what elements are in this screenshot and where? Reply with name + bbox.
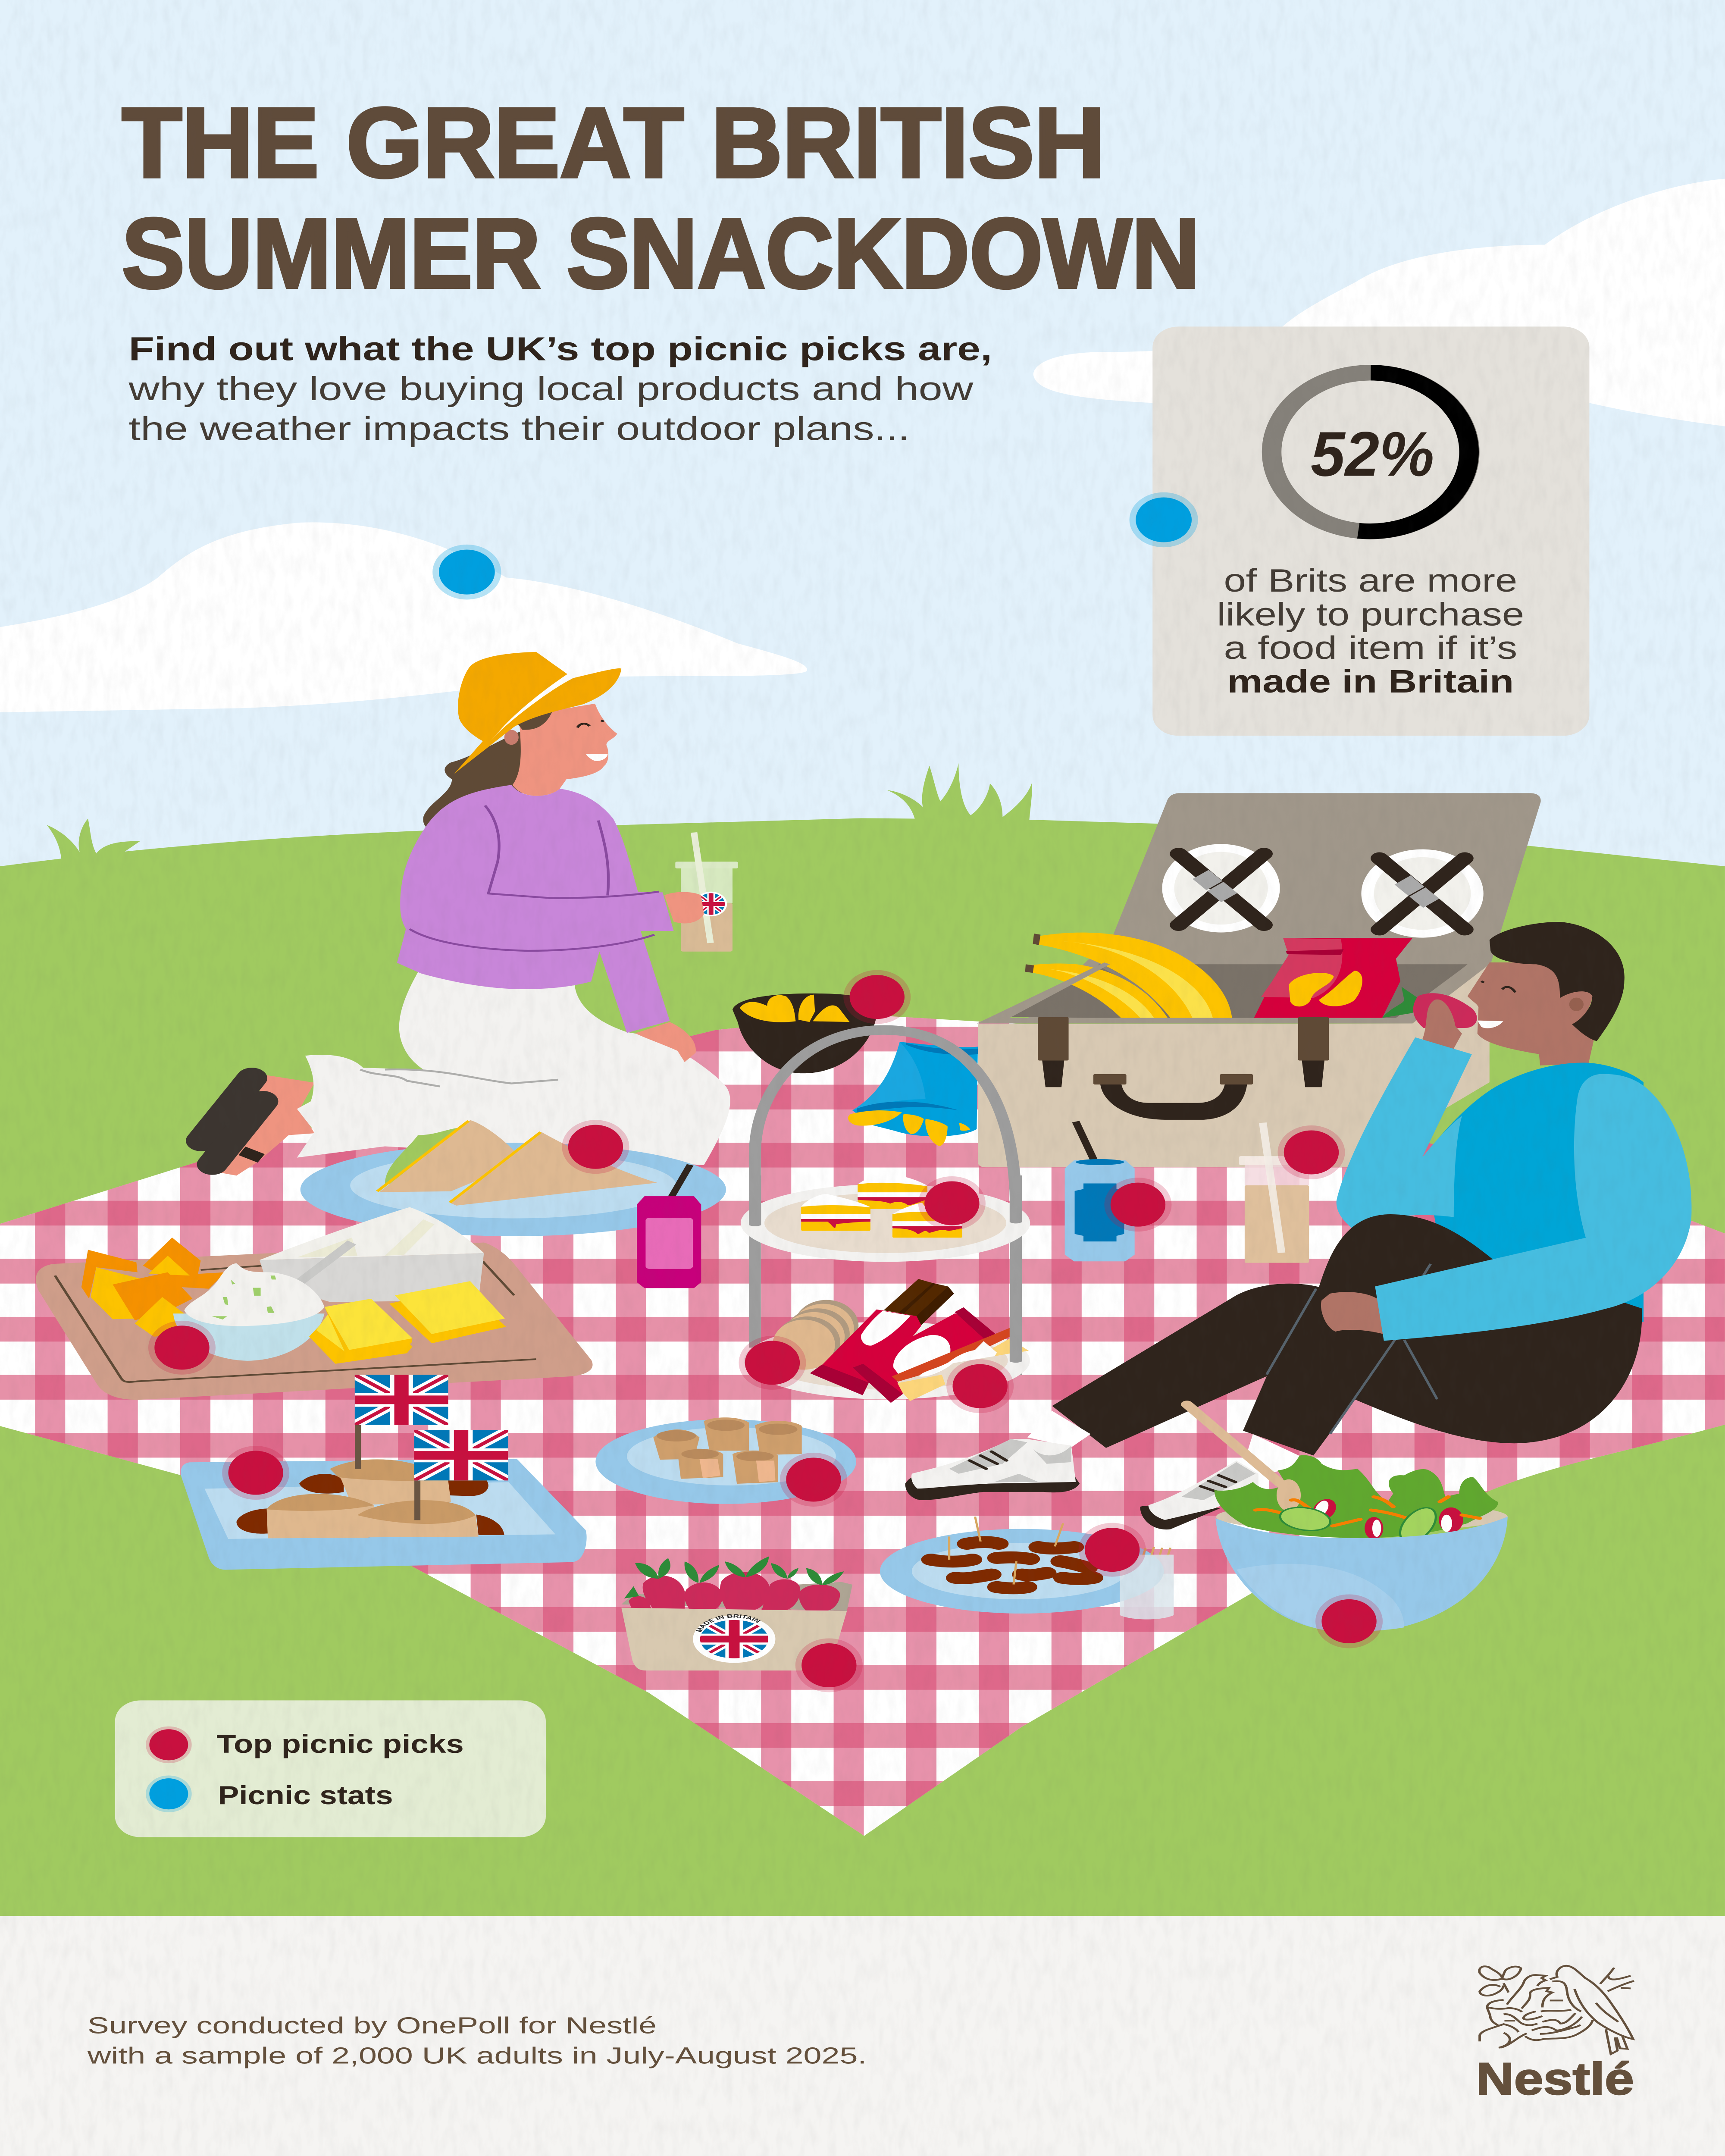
cake slice back <box>858 1172 927 1209</box>
blue can <box>1065 1122 1135 1261</box>
footer band <box>0 1916 1725 2156</box>
red marker: pork pies <box>780 1453 847 1507</box>
stat caption <box>1217 562 1524 699</box>
red marker: bowl of crisps <box>843 970 911 1024</box>
blue marker: stat panel <box>1129 492 1198 547</box>
punnet box <box>621 1608 847 1670</box>
grass tuft left <box>47 818 140 869</box>
tray <box>181 1459 587 1570</box>
donut chart <box>1272 373 1470 531</box>
iced coffee <box>1239 1123 1315 1263</box>
face and neck <box>513 704 617 796</box>
intro text <box>128 331 992 447</box>
cheese slices <box>309 1313 413 1364</box>
chocolate bar <box>883 1279 954 1325</box>
hill <box>0 818 1725 1917</box>
wordmark: Nestlé <box>1476 2053 1634 2104</box>
hat <box>454 652 621 774</box>
head <box>1468 962 1594 1065</box>
flag one <box>355 1375 448 1425</box>
lid <box>1027 793 1541 1022</box>
intro text: why they love buying local products and how <box>128 371 974 407</box>
survey note: Survey conducted by OnePoll for Nestlé <box>88 2012 657 2038</box>
grass tuft right <box>887 763 1032 824</box>
legend <box>115 1700 546 1837</box>
purple jumper <box>397 785 673 1033</box>
red marker: sandwiches <box>562 1120 629 1174</box>
stand leg foot <box>1010 1316 1022 1363</box>
intro text: Find out what the UK’s top picnic picks are, <box>129 331 992 367</box>
cake slice left <box>801 1194 870 1231</box>
salad spoon <box>1187 1404 1280 1484</box>
sausage rolls <box>299 1474 488 1496</box>
percentage: 52% <box>1311 419 1434 489</box>
lower plate <box>744 1322 1030 1399</box>
title: SUMMER SNACKDOWN <box>122 198 1200 309</box>
flag poles <box>358 1425 417 1520</box>
hand on knee <box>1321 1292 1384 1334</box>
lettuce <box>1215 1455 1498 1538</box>
picnic hamper <box>848 793 1541 1167</box>
red marker: iced coffee <box>1277 1125 1345 1179</box>
red marker: salad <box>1315 1594 1383 1648</box>
stat caption: made in Britain <box>1227 663 1514 699</box>
trousers <box>905 1214 1642 1529</box>
lid plates <box>1162 844 1484 938</box>
plate of pork pies <box>595 1417 856 1504</box>
panel: 52% stat <box>1152 326 1589 736</box>
legend item: top picnic picks: Top picnic picks <box>216 1729 464 1758</box>
cloud: left <box>0 522 807 712</box>
toothpick glass <box>1120 1547 1174 1620</box>
red wrappers <box>810 1307 996 1403</box>
Nestlé logo <box>1476 1966 1634 2104</box>
salad bowl <box>1187 1404 1508 1632</box>
dip bowl <box>173 1313 325 1361</box>
red marker: sausage rolls <box>222 1446 289 1500</box>
shoes and socks <box>1027 1411 1091 1447</box>
raising hand <box>1422 1000 1462 1052</box>
hamper interior <box>1011 964 1468 1022</box>
blue marker: cloud <box>432 545 501 599</box>
sausage roll tray with flags <box>181 1375 587 1570</box>
bread slices <box>773 1300 858 1370</box>
strawberry punnet <box>621 1557 852 1670</box>
iced drink <box>675 833 738 952</box>
hamper handle <box>1093 1074 1253 1120</box>
torso <box>1424 1063 1644 1322</box>
orange crisps <box>81 1250 138 1299</box>
stand legs over plate <box>749 1175 1022 1226</box>
stat caption: of Brits are more <box>1224 562 1517 599</box>
bananas <box>1099 964 1173 1018</box>
leg and foot <box>220 1075 315 1175</box>
made in britain badge <box>693 1614 775 1663</box>
pink can <box>637 1165 701 1288</box>
red crisp packet <box>1254 938 1412 1018</box>
red marker: blue can <box>1104 1178 1171 1232</box>
cake stand arch <box>755 1030 1016 1375</box>
sandwich plate <box>301 1143 726 1236</box>
red marker: bread <box>739 1336 806 1390</box>
blue crisp packet <box>848 1042 978 1146</box>
hair <box>423 730 528 829</box>
flag two <box>414 1430 508 1480</box>
survey note: with a sample of 2,000 UK adults in July-August 2025. <box>87 2042 867 2068</box>
intro text: the weather impacts their outdoor plans... <box>129 411 910 447</box>
cheese wedge <box>260 1253 484 1302</box>
red marker: meatballs <box>1079 1523 1146 1577</box>
hand on drink <box>664 892 704 924</box>
man figure <box>905 922 1691 1529</box>
legend item: picnic stats <box>146 1775 393 1812</box>
survey note <box>87 2012 867 2068</box>
strawberries <box>629 1572 840 1611</box>
red marker: chocolate <box>946 1359 1014 1413</box>
legend item: picnic stats: Picnic stats <box>218 1780 393 1810</box>
strawberry <box>1382 987 1421 1018</box>
red marker: cheese and crisps <box>148 1321 216 1375</box>
hand on knee <box>635 1022 696 1062</box>
bowl of crisps <box>733 993 877 1073</box>
cloud: upper right <box>1033 179 1725 426</box>
skirt <box>297 972 730 1165</box>
raised arm <box>1337 1037 1472 1232</box>
salad toppings <box>1255 1497 1480 1545</box>
hamper body <box>978 964 1490 1167</box>
title <box>122 88 1200 309</box>
cake stand tiers <box>741 1172 1030 1403</box>
title: THE GREAT BRITISH <box>122 88 1105 198</box>
hamper straps <box>1038 1017 1329 1087</box>
man's arm <box>1375 1074 1691 1341</box>
upper plate <box>741 1184 1030 1262</box>
red marker: cakes <box>918 1176 986 1230</box>
woman figure <box>201 652 738 1175</box>
meatball plate <box>880 1517 1174 1620</box>
icon: nest and birds <box>1479 1966 1634 2054</box>
red marker: strawberries <box>795 1638 863 1692</box>
made in britain badge: MADE IN BRITAIN <box>695 1614 762 1633</box>
cake slice right <box>892 1203 962 1238</box>
cheese board <box>36 1207 593 1400</box>
legend item: top picnic picks <box>146 1727 464 1763</box>
shoes <box>201 1078 263 1164</box>
layered cake <box>892 1328 1029 1401</box>
sandwiches <box>377 1120 657 1206</box>
board <box>36 1242 593 1400</box>
bowl body <box>1215 1517 1508 1632</box>
hair <box>1490 922 1625 1041</box>
stat caption: a food item if it’s <box>1224 630 1517 666</box>
stat caption: likely to purchase <box>1217 596 1524 632</box>
